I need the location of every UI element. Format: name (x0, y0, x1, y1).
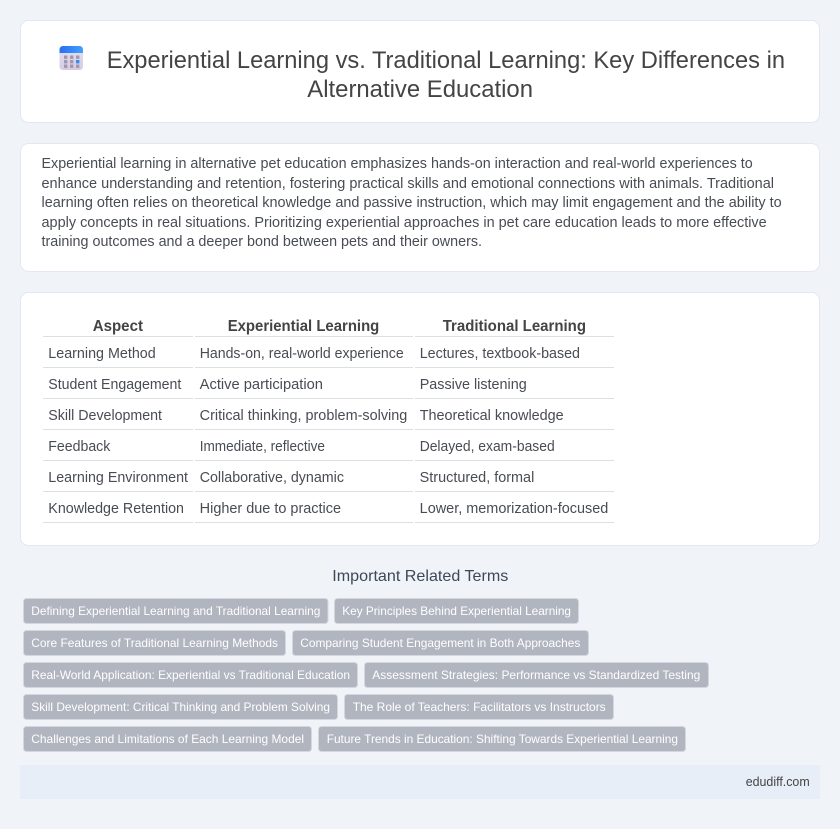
tag: defining (24, 598, 328, 624)
tag: role of teachers (344, 694, 614, 720)
table row: knowledge retention: Higher due to practice (200, 501, 341, 517)
table header row: Experiential Learning (228, 318, 379, 335)
table row: skill development: Critical thinking, problem-solving (200, 408, 407, 424)
title (107, 47, 785, 103)
table row: knowledge retention (48, 501, 608, 517)
table row: student engagement: Active participation (200, 377, 323, 393)
panel: title header (20, 20, 820, 122)
tag: assessment strategies: Assessment Strategies: Performance vs Standardized Testing (372, 668, 700, 682)
tag: core features (24, 630, 286, 656)
title: Alternative Education (307, 76, 533, 103)
table row: learning method: Lectures, textbook-based (420, 346, 580, 362)
tag: future trends: Future Trends in Education: Shifting Towards Experiential Learning (327, 732, 678, 746)
icon: calendar (60, 46, 83, 70)
tag: real-world application (24, 662, 358, 688)
table row: learning method: Learning Method (48, 346, 156, 362)
table header row: Aspect (93, 318, 143, 335)
tag: real-world application: Real-World Application: Experiential vs Traditional Education (31, 668, 350, 682)
table row: knowledge retention: Knowledge Retention (48, 501, 184, 517)
table rules (43, 336, 614, 523)
table row: feedback: Immediate, reflective (200, 439, 325, 455)
table row: feedback (48, 439, 555, 455)
table row: learning method: Hands-on, real-world experience (200, 346, 404, 362)
tag: challenges (24, 726, 312, 752)
table header row (93, 318, 586, 335)
table row: feedback: Feedback (48, 439, 111, 455)
tag: assessment strategies (364, 662, 708, 688)
tag: comparing engagement (292, 630, 588, 656)
table row: learning environment (48, 470, 534, 486)
footer bar (20, 765, 820, 799)
tag: defining: Defining Experiential Learning and Traditional Learning (31, 604, 320, 618)
heading: important related terms: Important Related Terms (332, 568, 508, 585)
text block: introduction paragraph: Experiential learning in alternative pet education emphasizes hands-on interaction and real-world experiences to (42, 156, 753, 172)
table row: knowledge retention: Lower, memorization-focused (420, 501, 608, 517)
text block: introduction paragraph: apply concepts in real situations. Prioritizing experiential approaches in pet care education leads to more effective (42, 215, 767, 231)
table row: feedback: Delayed, exam-based (420, 439, 555, 455)
panel: introduction (20, 144, 820, 272)
table row: skill development (48, 408, 564, 424)
tag: key principles (334, 598, 578, 624)
table row: learning environment: Structured, formal (420, 470, 534, 486)
table row: student engagement (48, 377, 527, 393)
footer text: site name: edudiff.com (746, 774, 810, 789)
table row: skill development: Theoretical knowledge (420, 408, 564, 424)
table row: learning environment: Learning Environment (48, 470, 188, 486)
tag: challenges: Challenges and Limitations of Each Learning Model (31, 732, 304, 746)
tag: core features: Core Features of Traditional Learning Methods (31, 636, 278, 650)
title: Experiential Learning vs. Traditional Learning: Key Differences in (107, 47, 785, 74)
tag: skill development: Skill Development: Critical Thinking and Problem Solving (31, 700, 330, 714)
tag: comparing engagement: Comparing Student Engagement in Both Approaches (300, 636, 580, 650)
table header row: Traditional Learning (443, 318, 586, 335)
text block: introduction paragraph: learning often relies on theoretical knowledge and passive instruction, which may limit engagement and the ability to (42, 195, 782, 211)
table row: student engagement: Passive listening (420, 377, 527, 393)
panel: comparison table (20, 292, 820, 546)
text block: introduction paragraph (42, 156, 782, 250)
table row: student engagement: Student Engagement (48, 377, 181, 393)
table row: learning method (48, 346, 580, 362)
text block: introduction paragraph: training outcomes and a deeper bond between pets and their owners. (42, 234, 482, 250)
tag list: related terms (24, 598, 708, 752)
tag: future trends (318, 726, 686, 752)
tag: skill development (24, 694, 338, 720)
tag: key principles: Key Principles Behind Experiential Learning (342, 604, 571, 618)
text block: introduction paragraph: enhance understanding and retention, fostering practical skills and emotional connections with animals. Traditional (42, 176, 774, 192)
tag: role of teachers: The Role of Teachers: Facilitators vs Instructors (353, 700, 606, 714)
table row: skill development: Skill Development (48, 408, 162, 424)
table row: learning environment: Collaborative, dynamic (200, 470, 344, 486)
